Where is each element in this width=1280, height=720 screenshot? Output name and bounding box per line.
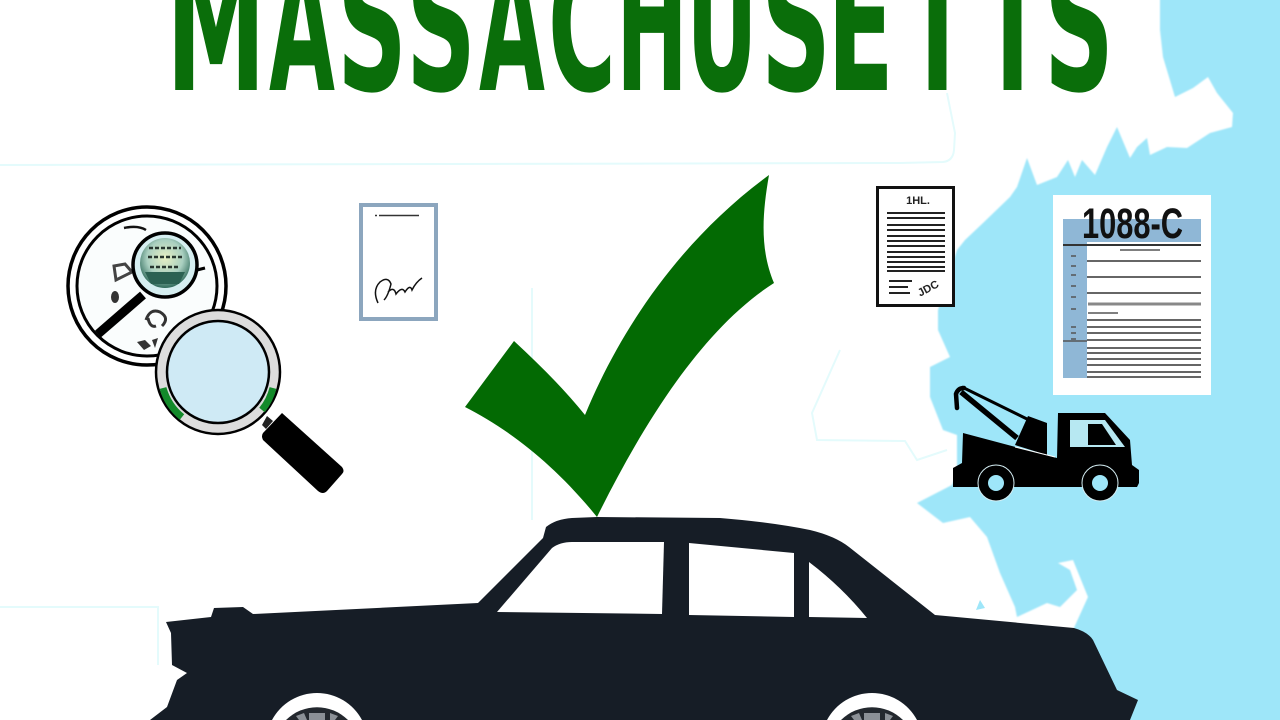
car silhouette <box>150 517 1138 720</box>
document heading: 1HL. <box>906 195 930 207</box>
form number: 1088-C <box>1082 200 1183 248</box>
form 1098-C document <box>1053 195 1211 395</box>
front magnifier <box>156 310 344 493</box>
crane <box>956 387 1055 457</box>
left wheel <box>272 693 362 720</box>
small lens with meter <box>133 233 197 297</box>
icon: tow truck <box>953 387 1139 501</box>
truck window <box>1070 420 1125 447</box>
state border lines <box>0 93 955 665</box>
document stamp text: JDC <box>916 278 941 299</box>
document with text lines <box>878 188 954 306</box>
truck wheels <box>978 465 1118 501</box>
icon: magnifying glass pair <box>68 207 344 493</box>
ocean <box>917 0 1280 720</box>
checkmark <box>465 175 774 517</box>
back magnifier circle <box>68 207 226 365</box>
car windows <box>497 542 867 618</box>
right wheel <box>827 693 917 720</box>
document with signature <box>361 205 436 319</box>
